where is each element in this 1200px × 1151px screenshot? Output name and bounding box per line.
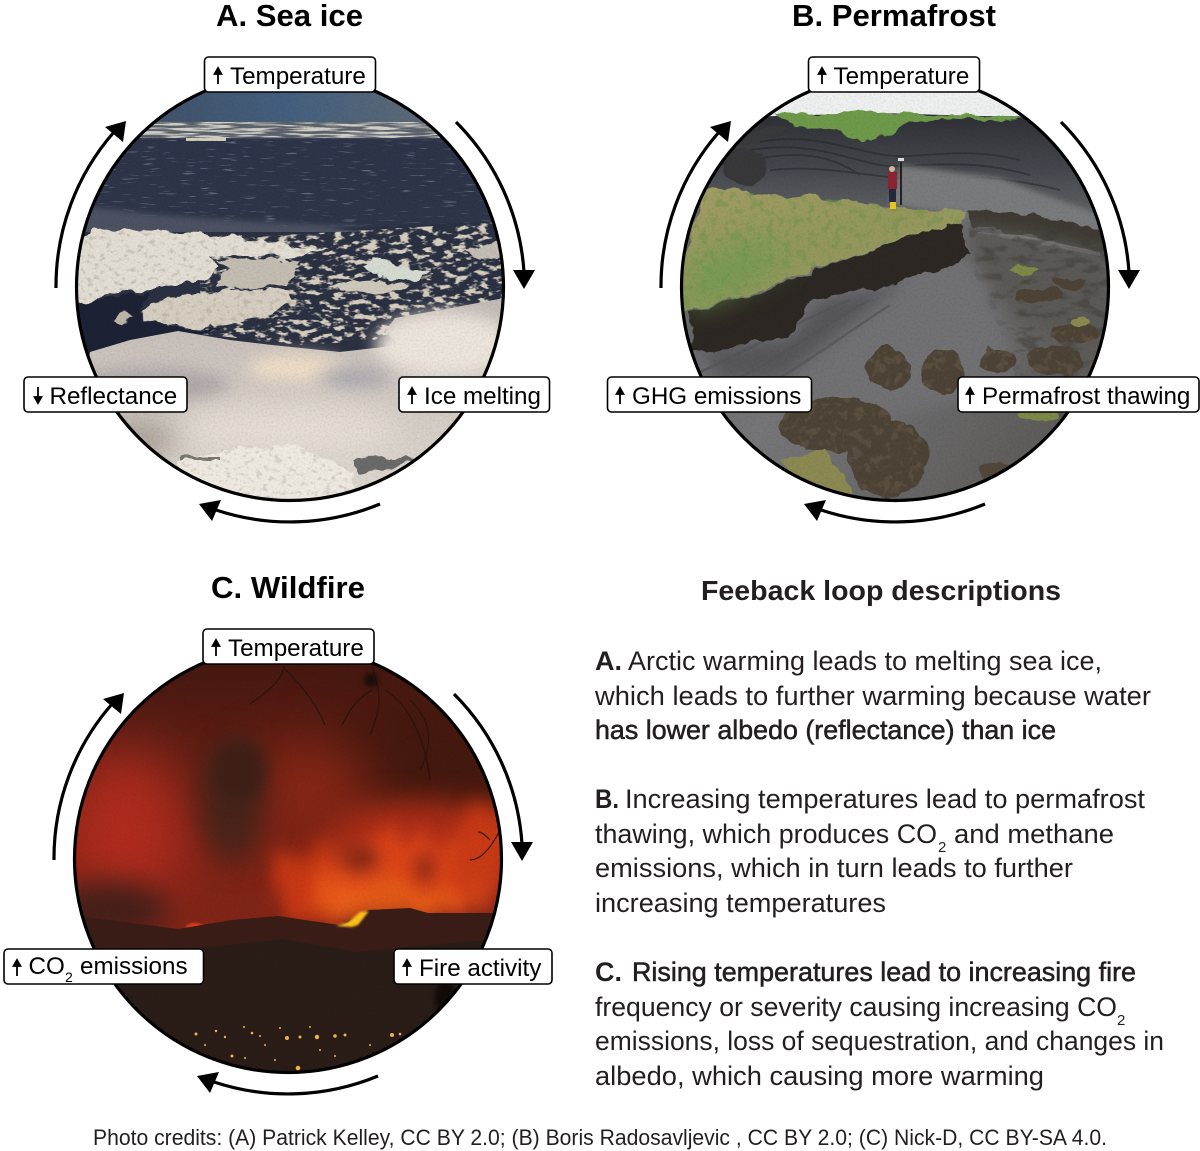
text block: A description bbox=[594, 646, 1151, 745]
text block: C description bbox=[595, 957, 1164, 1091]
tree branches bbox=[250, 665, 500, 860]
label: ice melting: Ice melting bbox=[424, 383, 541, 410]
city lights bbox=[194, 1026, 401, 1070]
label: temperature: Temperature bbox=[228, 635, 364, 662]
title: C. Wildfire: C. Wildfire bbox=[211, 570, 365, 605]
text block: C description: C. bbox=[595, 957, 622, 987]
label: temperature bbox=[808, 57, 980, 92]
panel: A sea ice bbox=[24, 0, 550, 522]
label: CO2 emissions bbox=[4, 949, 204, 985]
photo: wildfire circle bbox=[76, 664, 500, 1071]
text block: C description: emissions, loss of sequestration, and changes in bbox=[595, 1026, 1164, 1056]
text block: B description: emissions, which in turn leads to further bbox=[595, 853, 1073, 883]
arrow: CO2 emissions to temperature bbox=[54, 693, 124, 860]
label: GHG emissions: GHG emissions bbox=[632, 383, 801, 410]
arrow: GHG emissions to temperature bbox=[661, 121, 731, 288]
text block: B description: and methane bbox=[954, 819, 1114, 849]
arrow: permafrost thawing to GHG emissions bbox=[804, 500, 985, 522]
text block: B description: Increasing temperatures lead to permafrost bbox=[625, 784, 1145, 814]
text block: C description: 2 bbox=[1117, 1012, 1125, 1029]
text block: A description: A. bbox=[595, 646, 622, 676]
label: permafrost thawing: Permafrost thawing bbox=[982, 383, 1190, 410]
label: ice melting bbox=[399, 377, 550, 412]
label: fire activity: Fire activity bbox=[419, 955, 542, 982]
label: CO2 emissions: 2 bbox=[65, 969, 73, 985]
circle outline bbox=[76, 74, 504, 500]
text block: B description bbox=[595, 784, 1145, 918]
label: temperature bbox=[203, 629, 374, 664]
arrow: ice melting to reflectance bbox=[199, 500, 380, 522]
panel: B permafrost bbox=[608, 0, 1199, 522]
text block: A description: Arctic warming leads to melting sea ice, bbox=[628, 646, 1102, 676]
heading: descriptions: Feeback loop descriptions bbox=[701, 575, 1061, 606]
text block: C description: Rising temperatures lead to increasing fire bbox=[632, 957, 1136, 987]
panel: C wildfire bbox=[4, 570, 552, 1094]
label: CO2 emissions: CO bbox=[28, 953, 65, 980]
circle outline bbox=[682, 74, 1108, 500]
text block: C description: frequency or severity causing increasing CO bbox=[595, 992, 1117, 1022]
label: permafrost thawing bbox=[958, 377, 1199, 412]
circle outline bbox=[74, 646, 502, 1072]
fire glow bbox=[269, 804, 511, 923]
label: temperature: Temperature bbox=[230, 63, 366, 90]
label: fire activity bbox=[394, 949, 552, 984]
text block: C description: albedo, which causing more warming bbox=[595, 1061, 1044, 1091]
text block: A description: has lower albedo (reflectance) than ice bbox=[595, 715, 1056, 745]
label: temperature: Temperature bbox=[834, 63, 969, 90]
label: GHG emissions bbox=[608, 377, 812, 412]
text block: B description: B. bbox=[595, 784, 619, 814]
label: CO2 emissions: emissions bbox=[80, 953, 188, 980]
arrow: fire activity to CO2 emissions bbox=[197, 1072, 378, 1094]
label: reflectance bbox=[24, 377, 187, 412]
person with survey pole bbox=[888, 158, 904, 209]
arrow: temperature to fire activity bbox=[454, 694, 533, 861]
text block: B description: 2 bbox=[938, 839, 946, 856]
arrow: temperature to ice melting bbox=[456, 122, 535, 289]
arrow: temperature to permafrost thawing bbox=[1061, 122, 1140, 289]
label: reflectance: Reflectance bbox=[50, 383, 177, 410]
text block: B description: thawing, which produces CO bbox=[595, 819, 937, 849]
photo: sea ice circle bbox=[78, 92, 502, 499]
label: temperature bbox=[204, 57, 376, 92]
text block: B description: increasing temperatures bbox=[595, 888, 886, 918]
text block: A description: which leads to further warming because water bbox=[594, 681, 1151, 711]
photo: permafrost circle bbox=[683, 92, 1107, 499]
arrow: reflectance to temperature bbox=[56, 121, 126, 288]
panel: feedback loop descriptions bbox=[594, 575, 1164, 1091]
photo credits: Photo credits: (A) Patrick Kelley, CC BY 2.0; (B) Boris Radosavljevic , CC BY 2.0; (C) Nick-D, CC BY-SA 4.0. bbox=[93, 1125, 1107, 1150]
